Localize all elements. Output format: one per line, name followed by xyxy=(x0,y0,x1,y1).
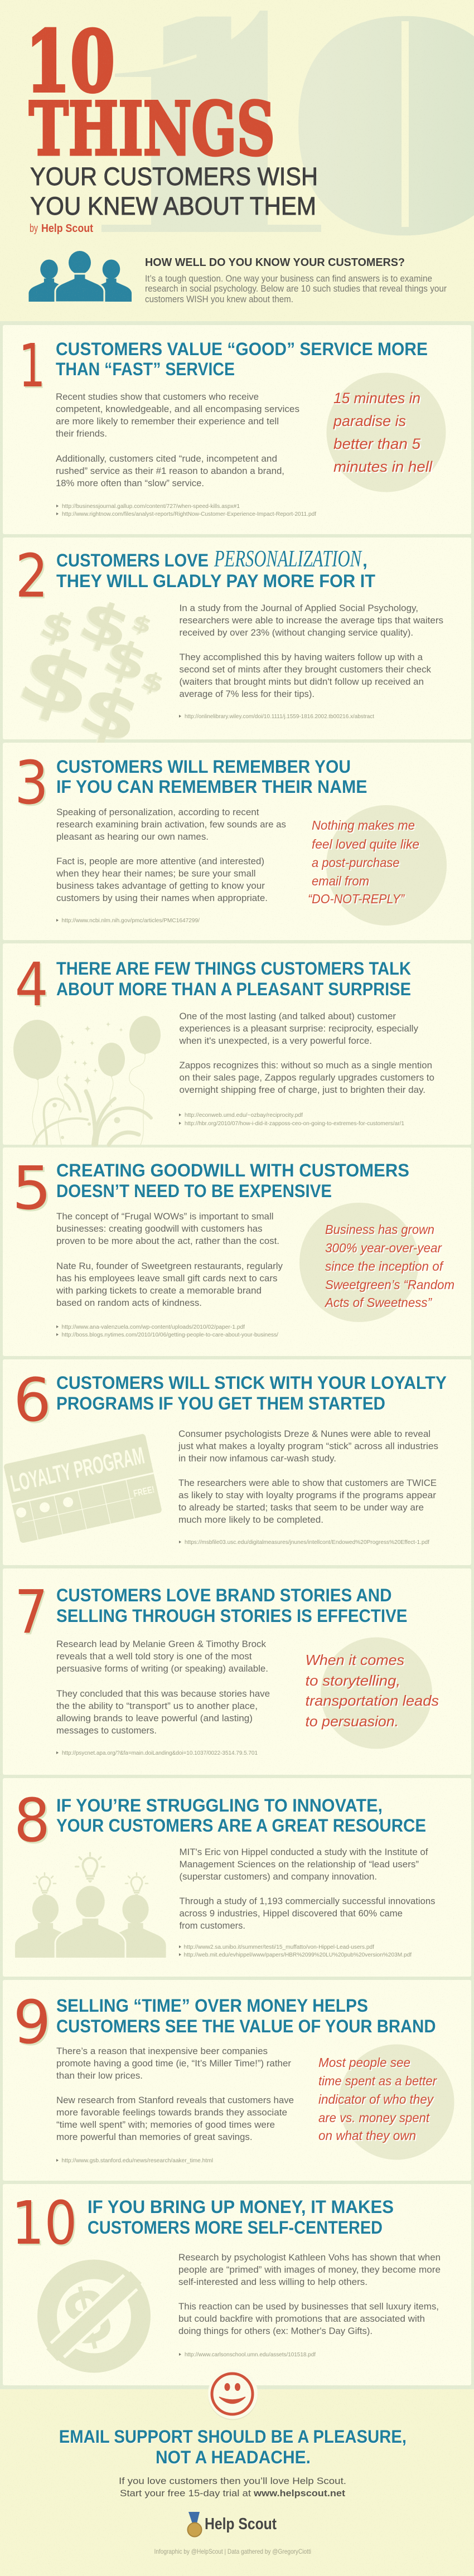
panel 4: pleasant surprise xyxy=(3,943,471,1145)
body text: much more likely to be completed. xyxy=(178,1514,323,1525)
body text: Additionally, customers cited “rude, incompetent and xyxy=(56,453,277,464)
callout quote: Nothing makes me xyxy=(312,818,415,832)
body text: more powerful than memories of great savings. xyxy=(56,2132,252,2142)
callout quote: a post-purchase xyxy=(312,855,399,870)
body text: (superstar customers) and company innovation. xyxy=(180,1871,377,1882)
body text: as likely to stay with loyalty programs if the programs appear xyxy=(178,1490,436,1500)
body text: Research by psychologist Kathleen Vohs has shown that when xyxy=(178,2252,441,2263)
body text: on their sales page, Zappos regularly upgrades customers to xyxy=(180,1072,434,1083)
closing text: If you love customers then you’ll love Help Scout. xyxy=(119,2476,346,2486)
panel 8: innovation xyxy=(3,1778,471,1977)
sources: http://businessjournal.gallup.com/content/727/when-speed-kills.aspx#1 xyxy=(62,503,240,510)
callout quote xyxy=(299,1203,454,1322)
sources xyxy=(56,503,316,517)
heading: SELLING “TIME” OVER MONEY HELPS xyxy=(56,1996,368,2016)
body text: to already be started; tasks that seem to be under way are xyxy=(178,1502,424,1513)
body text: Nate Ru, founder of Sweetgreen restaurants, regularly xyxy=(56,1261,283,1271)
callout quote: indicator of who they xyxy=(318,2092,434,2107)
body text: persuasive forms of writing (or speaking) available. xyxy=(56,1663,268,1674)
closing text: www.helpscout.net xyxy=(253,2488,345,2498)
closing heading: EMAIL SUPPORT SHOULD BE A PLEASURE, xyxy=(59,2427,407,2447)
title: THINGS: THINGS xyxy=(29,86,275,172)
body text: business takes advantage of getting to know your xyxy=(56,880,265,891)
heading xyxy=(56,1160,409,1201)
intro text: research in social psychology. Below are 10 such studies that reveal things your xyxy=(145,284,447,294)
sources: http://web.mit.edu/evhippel/www/papers/HBR%2099%20LU%20pub%20version%203M.pdf xyxy=(184,1952,412,1958)
icon: dollar signs: $ xyxy=(138,665,168,699)
icon: dollar signs: $ xyxy=(129,609,155,638)
body text: Consumer psychologists Dreze & Nunes were able to reveal xyxy=(178,1429,431,1439)
body text xyxy=(56,391,299,488)
sources xyxy=(179,1112,404,1127)
body text: In a study from the Journal of Applied Social Psychology, xyxy=(180,603,418,613)
number 1: 1 xyxy=(19,332,46,401)
heading: IF YOU CAN REMEMBER THEIR NAME xyxy=(56,777,367,797)
callout quote: “DO-NOT-REPLY” xyxy=(308,892,405,906)
body text: Through a study of 1,193 commercially successful innovations xyxy=(180,1896,435,1906)
panel 5: goodwill xyxy=(3,1147,471,1356)
body text xyxy=(179,1011,434,1095)
body text xyxy=(56,807,286,903)
callout quote: on what they own xyxy=(318,2128,416,2143)
sources: http://econweb.umd.edu/~ozbay/reciprocity.pdf xyxy=(185,1112,303,1118)
callout quote: When it comes xyxy=(306,1652,404,1668)
panel 9: selling time xyxy=(3,1980,471,2181)
background watermark numeral 10 xyxy=(101,0,474,302)
source: http://onlinelibrary.wiley.com/doi/10.1111/j.1559-1816.2002.tb00216.x/abstract xyxy=(185,713,374,720)
body text: just what makes a loyalty program “stick” across all industries xyxy=(178,1441,438,1451)
heading: SELLING THROUGH STORIES IS EFFECTIVE xyxy=(56,1606,407,1626)
heading: DOESN’T NEED TO BE EXPENSIVE xyxy=(56,1181,332,1201)
icon: dollar signs: $ xyxy=(71,669,149,758)
number 3: 3 xyxy=(14,749,49,818)
source: http://psycnet.apa.org/?&fa=main.doiLanding&doi=10.1037/0022-3514.79.5.701 xyxy=(62,1750,258,1756)
icon: loyalty card: LOYALTY PROGRAM xyxy=(8,1442,147,1498)
number 9: 9 xyxy=(13,1988,51,2057)
heading: , xyxy=(362,550,367,570)
icon: dollar signs: $ xyxy=(72,587,138,662)
callout quote: since the inception of xyxy=(325,1259,444,1274)
body text: more favorable feelings towards brands they associate xyxy=(56,2107,287,2118)
closing heading: NOT A HEADACHE. xyxy=(156,2447,311,2467)
source: https://msbfile03.usc.edu/digitalmeasures/jnunes/intellcont/Endowed%20Progress%20Effect-1.pdf xyxy=(185,1539,429,1546)
subtitle xyxy=(30,162,318,220)
body text: when they hear their names; be sure your small xyxy=(56,868,256,879)
callout quote: are vs. money spent xyxy=(318,2110,431,2125)
icon: three customers xyxy=(28,251,132,302)
callout quote: to persuasion. xyxy=(306,1713,399,1730)
number 5: 5 xyxy=(12,1154,51,1223)
heading: CUSTOMERS LOVE BRAND STORIES AND xyxy=(56,1585,391,1605)
body text: doing things for others (ex: Mother's Day Gifts). xyxy=(178,2326,373,2336)
body text: MIT's Eric von Hippel conducted a study with the Institute of xyxy=(180,1847,428,1857)
body text: rushed” service as their #1 reason to abandon a brand, xyxy=(56,466,284,476)
body text: Management Sciences on the relationship of “lead users” xyxy=(180,1859,419,1870)
callout quote: paradise is xyxy=(333,413,406,429)
body text: self-interested and less willing to help others. xyxy=(178,2277,367,2287)
heading: IF YOU’RE STRUGGLING TO INNOVATE, xyxy=(56,1795,383,1815)
heading xyxy=(56,757,367,797)
body text: competent, knowledgeable, and all encompasing services xyxy=(56,404,299,414)
body text: allowing brands to leave powerful (and lasting) xyxy=(56,1713,253,1723)
callout quote xyxy=(308,805,447,926)
body text: Research lead by Melanie Green & Timothy Brock xyxy=(56,1639,266,1649)
sources: http://hbr.org/2010/07/how-i-did-it-zapposs-ceo-on-going-to-extremes-for-customers/ar/1 xyxy=(185,1120,404,1127)
sources: http://www.ana-valenzuela.com/wp-content/uploads/2010/02/paper-1.pdf xyxy=(61,1324,245,1330)
panel 7: brand stories xyxy=(3,1568,471,1775)
logo: Help Scout: Help Scout xyxy=(205,2515,277,2533)
body text: pleasant as hearing our own names. xyxy=(56,831,209,842)
heading xyxy=(56,1795,426,1836)
intro text: customers WISH you knew about them. xyxy=(145,294,293,304)
number 7: 7 xyxy=(14,1578,48,1647)
callout quote xyxy=(306,1637,439,1749)
heading: YOUR CUSTOMERS ARE A GREAT RESOURCE xyxy=(56,1815,426,1836)
heading: ABOUT MORE THAN A PLEASANT SURPRISE xyxy=(56,979,411,999)
subtitle: YOU KNEW ABOUT THEM xyxy=(30,192,316,220)
body text: (waiters that brought mints but didn't follow up received an xyxy=(180,676,424,687)
callout quote xyxy=(327,372,446,492)
source: http://www.gsb.stanford.edu/news/research/aaker_time.html xyxy=(61,2157,213,2164)
body text: across 9 industries, Hippel discovered that 60% came xyxy=(180,1908,403,1919)
body text: has his employees leave small gift cards next to cars xyxy=(56,1273,278,1284)
body text: people are “primed” with images of money, they become more xyxy=(178,2264,441,2275)
body text: than their low prices. xyxy=(56,2070,143,2081)
body text xyxy=(178,2252,441,2336)
heading: THEY WILL GLADLY PAY MORE FOR IT xyxy=(56,571,375,591)
heading: PROGRAMS IF YOU GET THEM STARTED xyxy=(56,1393,385,1413)
icon: dollar signs: $ xyxy=(7,625,107,738)
byline: Help Scout xyxy=(41,222,93,235)
heading: PERSONALIZATION xyxy=(214,546,362,572)
number 2: 2 xyxy=(16,542,48,611)
callout quote: minutes in hell xyxy=(333,458,433,475)
number 8: 8 xyxy=(14,1786,50,1856)
body text: researchers were able to increase the average tips that waiters xyxy=(180,615,443,626)
byline: by xyxy=(30,222,38,235)
body text: customers by using their names when appropriate. xyxy=(56,893,268,903)
sources xyxy=(56,1324,278,1338)
callout quote: better than 5 xyxy=(333,435,421,452)
heading: THAN “FAST” SERVICE xyxy=(56,359,235,379)
callout quote: Business has grown xyxy=(325,1222,434,1237)
number 4: 4 xyxy=(15,951,49,1020)
left edge strip cover xyxy=(0,1450,3,1561)
icon: balloons and streamers xyxy=(13,1016,161,1145)
panel 1: good vs fast service xyxy=(3,325,471,534)
heading xyxy=(56,958,411,999)
header panel xyxy=(26,0,474,304)
callout quote: 15 minutes in xyxy=(333,390,420,406)
source: http://www.carlsonschool.umn.edu/assets/101518.pdf xyxy=(185,2351,316,2358)
heading: CUSTOMERS MORE SELF-CENTERED xyxy=(88,2217,383,2238)
body text: when it's unexpected, is a very powerful force. xyxy=(179,1035,372,1046)
body text: They concluded that this was because stories have xyxy=(56,1688,270,1699)
body text: overnight shipping free of charge, just to brighten their day. xyxy=(180,1084,425,1095)
heading xyxy=(56,1996,436,2036)
body text: Speaking of personalization, according to recent xyxy=(56,807,259,817)
icon: no money sign xyxy=(47,2269,141,2365)
heading xyxy=(56,1585,407,1626)
heading: CUSTOMERS VALUE “GOOD” SERVICE MORE xyxy=(56,339,428,359)
body text: Zappos recognizes this: without so much as a single mention xyxy=(180,1060,432,1071)
heading xyxy=(88,2197,394,2238)
callout quote: to storytelling, xyxy=(306,1672,400,1689)
icon: no money sign: $ xyxy=(55,2269,119,2365)
body text xyxy=(56,1639,270,1736)
sources: http://boss.blogs.nytimes.com/2010/10/06/getting-people-to-care-about-your-business/ xyxy=(61,1331,278,1338)
footer panel xyxy=(0,2369,474,2576)
icon: smiley badge xyxy=(208,2369,258,2420)
body text: 18% more often than “slow” service. xyxy=(56,478,204,488)
body text: The concept of “Frugal WOWs” is important to small xyxy=(56,1211,273,1222)
body text: average of 7% less for their tips). xyxy=(180,689,315,699)
source: http://www.ncbi.nlm.nih.gov/pmc/articles/PMC1647299/ xyxy=(61,917,200,924)
callout quote: Acts of Sweetness” xyxy=(324,1295,432,1310)
heading: CUSTOMERS SEE THE VALUE OF YOUR BRAND xyxy=(56,2016,436,2036)
body text: received by over 23% (without changing service quality). xyxy=(180,627,413,638)
body text xyxy=(180,603,443,699)
body text: their friends. xyxy=(56,428,107,439)
body text xyxy=(56,2046,294,2142)
heading xyxy=(56,339,428,379)
callout quote: Sweetgreen’s “Random xyxy=(325,1277,454,1292)
icon: loyalty card xyxy=(3,1434,162,1543)
callout quote: time spent as a better xyxy=(318,2074,437,2088)
callout quote: transportation leads xyxy=(306,1692,439,1709)
icon: dollar signs: $ xyxy=(35,602,80,653)
body text: This reaction can be used by businesses that sell luxury items, xyxy=(178,2301,439,2312)
callout quote: 300% year-over-year xyxy=(325,1241,442,1255)
body text: They accomplished this by having waiters follow up with a xyxy=(180,652,423,662)
heading xyxy=(56,1373,447,1413)
icon: dollar signs: $ xyxy=(98,627,154,693)
sources: http://www2.sa.unibo.it/summer/testi/15_muffatto/von-Hippel-Lead-users.pdf xyxy=(184,1944,374,1950)
icon: customers with light bulbs xyxy=(15,1853,166,1958)
subtitle: YOUR CUSTOMERS WISH xyxy=(30,162,318,191)
body text: One of the most lasting (and talked about) customer xyxy=(180,1011,396,1021)
heading: CUSTOMERS WILL REMEMBER YOU xyxy=(56,757,351,777)
body text: but could backfire with promotions that are associated with xyxy=(178,2313,425,2324)
icon: loyalty card: FREE! xyxy=(133,1484,156,1499)
title: 10: 10 xyxy=(26,13,115,111)
heading: CUSTOMERS WILL STICK WITH YOUR LOYALTY xyxy=(56,1373,447,1393)
closing text: Start your free 15-day trial at xyxy=(120,2488,251,2498)
heading: THERE ARE FEW THINGS CUSTOMERS TALK xyxy=(56,958,411,979)
panel 2: personalization xyxy=(3,538,471,758)
heading: IF YOU BRING UP MONEY, IT MAKES xyxy=(88,2197,394,2217)
body text xyxy=(180,1847,435,1931)
body text: reveals that a well told story is one of the most xyxy=(56,1651,252,1662)
body text: experiences is a pleasant surprise: reciprocity, especially xyxy=(180,1023,418,1034)
callout quote: Most people see xyxy=(318,2055,410,2070)
intro text xyxy=(145,274,447,304)
body text: messages to customers. xyxy=(56,1725,157,1736)
credits: Infographic by @HelpScout | Data gathered by @GregoryCiotti xyxy=(154,2548,311,2555)
panel 10: money and self-centeredness xyxy=(3,2184,471,2385)
sources xyxy=(179,1944,412,1958)
body text: with parking tickets to create a memorable brand xyxy=(56,1285,262,1296)
closing heading xyxy=(59,2427,407,2467)
heading: CREATING GOODWILL WITH CUSTOMERS xyxy=(56,1160,409,1180)
logo: Help Scout xyxy=(187,2512,277,2537)
body text: Fact is, people are more attentive (and interested) xyxy=(56,856,264,866)
body text xyxy=(56,1211,283,1308)
panel 6: loyalty programs xyxy=(0,1359,471,1565)
body text: “time well spent” with; memories of good times were xyxy=(56,2119,275,2130)
heading xyxy=(56,546,375,591)
panel 3: remember names xyxy=(3,743,471,940)
body text: There’s a reason that inexpensive beer companies xyxy=(56,2046,268,2056)
icon: dollar signs xyxy=(7,587,168,758)
number 6: 6 xyxy=(13,1366,51,1435)
body text: businesses: creating goodwill with customers has xyxy=(56,1223,262,1234)
callout quote xyxy=(318,2044,454,2160)
body text: based on random acts of kindness. xyxy=(56,1297,202,1308)
callout quote: email from xyxy=(312,874,369,888)
body text: proven to be more about the act, rather than the cost. xyxy=(56,1236,279,1246)
body text: The researchers were able to show that customers are TWICE xyxy=(178,1478,437,1488)
body text: Recent studies show that customers who receive xyxy=(56,391,259,402)
intro text: It’s a tough question. One way your business can find answers is to examine xyxy=(145,274,432,284)
body text: New research from Stanford reveals that customers have xyxy=(56,2095,294,2105)
body text: from customers. xyxy=(180,1920,245,1931)
heading: CUSTOMERS LOVE xyxy=(56,550,209,570)
intro heading: HOW WELL DO YOU KNOW YOUR CUSTOMERS? xyxy=(145,256,405,269)
body text: research examining brain activation, few sounds are as xyxy=(56,819,286,830)
sources: http://www.rightnow.com/files/analyst-reports/RightNow-Customer-Experience-Impact-Report-2011.pdf xyxy=(62,511,316,517)
body text: are more likely to remember their experience and tell xyxy=(56,416,279,427)
body text: in their now infamous car-wash study. xyxy=(178,1453,336,1464)
body text: promote having a good time (ie, “It’s Miller Time!”) rather xyxy=(56,2058,291,2069)
body text xyxy=(178,1429,438,1525)
closing text xyxy=(119,2476,346,2498)
body text: second set of mints after they brought customers their check xyxy=(180,664,431,675)
callout quote: feel loved quite like xyxy=(312,837,419,851)
body text: the the ability to “transport” us to another place, xyxy=(56,1701,258,1711)
number 10: 10 xyxy=(11,2189,77,2258)
